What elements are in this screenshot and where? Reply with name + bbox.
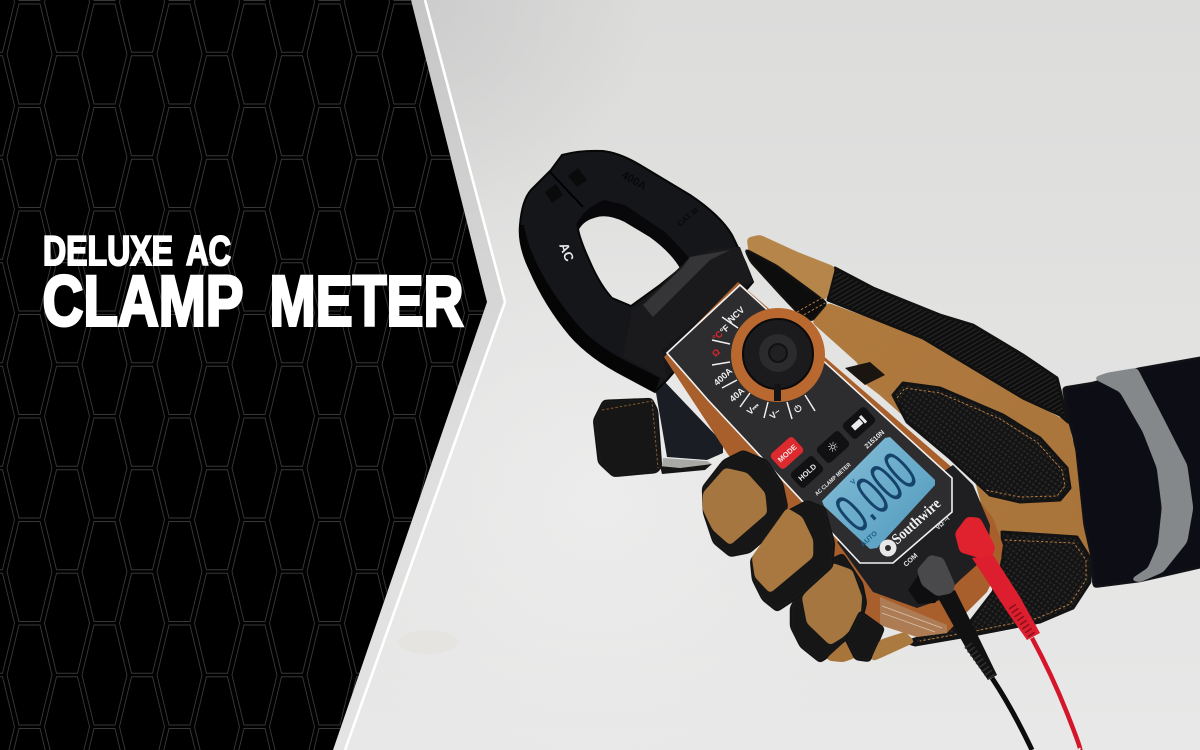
- dial ring: [731, 308, 825, 402]
- tan palm strip: [870, 632, 915, 662]
- buttons: [769, 406, 877, 489]
- knit black strip: [828, 268, 1068, 422]
- fingers: [702, 450, 915, 663]
- HOLD button: HOLD: [796, 462, 819, 483]
- volt label: VΩ·⊣: [935, 516, 951, 531]
- Southwire logo: [880, 496, 944, 556]
- meter name: AC CLAMP METER: [814, 462, 853, 497]
- rating mark: 400A: [620, 169, 648, 193]
- dial labels: [710, 305, 805, 421]
- jaw gap line: [550, 172, 583, 207]
- title: [42, 227, 464, 342]
- clamp jaws: [520, 151, 753, 392]
- chevron light band: [327, 0, 505, 750]
- black chevron panel with hexagon pattern: [0, 0, 487, 750]
- lower housing highlight: [880, 597, 947, 637]
- black wire: [992, 678, 1032, 750]
- lower pad stitching: [920, 540, 1086, 641]
- LCD V label: V: [850, 478, 858, 486]
- meter neck: [623, 247, 753, 380]
- back thumb and jaw underside: [593, 380, 723, 477]
- LCD screen: [822, 437, 935, 549]
- COM label: COM: [903, 552, 920, 568]
- face plate: [667, 285, 952, 563]
- orange housing: [664, 282, 1003, 637]
- jaw shape: [520, 151, 753, 392]
- model number: 21510N: [864, 429, 886, 450]
- brand name: Southwire: [889, 496, 944, 548]
- DC volts label: V⎓: [745, 400, 762, 417]
- tan palm: [812, 303, 1092, 575]
- black ribs: [968, 645, 992, 678]
- LCD display: [822, 437, 935, 549]
- grip highlight: [662, 458, 712, 468]
- palm under fingers: [825, 640, 857, 662]
- jack labels: [903, 516, 951, 568]
- title line 2: CLAMP: [42, 262, 244, 342]
- logo centre: [885, 545, 891, 551]
- hole inner wall: [576, 200, 692, 268]
- meter body: [664, 282, 1003, 637]
- black thumb: [593, 398, 662, 477]
- MODE button: MODE: [776, 442, 799, 464]
- grip shadow strip: [660, 464, 712, 474]
- black strain relief: [937, 590, 997, 680]
- dark grip: [655, 380, 723, 460]
- tan fingertip: [747, 235, 835, 313]
- resistance label: Ω: [710, 347, 722, 359]
- dial tick marks: [712, 317, 815, 419]
- textured palm pad: [893, 383, 1070, 502]
- black lower section: [837, 465, 990, 608]
- red strain relief: [972, 555, 1040, 640]
- AC volts label: V~: [767, 406, 783, 421]
- rotary dial: [731, 308, 825, 402]
- stitching on thumb: [797, 298, 825, 317]
- grey band: [1093, 368, 1193, 582]
- jaw bottom rim: [520, 225, 660, 392]
- temperature label: °C°F: [711, 322, 732, 343]
- black palm strip: [845, 610, 885, 662]
- palm pad stitching: [897, 388, 1065, 497]
- red test lead: [955, 517, 1080, 750]
- finger 1: [702, 450, 788, 557]
- LCD digits: 0.000: [823, 440, 929, 545]
- title line 1: AC: [186, 227, 231, 274]
- black thumb underside: [743, 247, 828, 322]
- black plug head: [917, 555, 955, 596]
- category mark: CAT III: [676, 206, 700, 229]
- dark glove behind meter: [845, 362, 885, 385]
- glove cuff and sleeve: [1062, 355, 1200, 588]
- dial knob: [743, 319, 813, 389]
- neck highlight: [643, 250, 730, 317]
- glove back of hand: [743, 235, 1092, 645]
- NCV label: NCV: [726, 305, 746, 325]
- chevron white line: [345, 0, 505, 750]
- finger 3: [790, 553, 867, 663]
- lower textured pad: [905, 532, 1090, 645]
- title line 1: DELUXE: [43, 227, 173, 274]
- knob centre: [759, 334, 797, 372]
- black cuff: [1062, 355, 1200, 588]
- title line 2: [42, 262, 464, 342]
- black test lead: [917, 555, 1032, 750]
- logo mark: [880, 540, 896, 556]
- dial pointer: [774, 384, 781, 401]
- housing seam lines: [882, 606, 942, 632]
- title line 2: METER: [270, 262, 464, 342]
- thumb stitching: [602, 401, 658, 468]
- red wire: [1032, 638, 1080, 750]
- knob hub: [769, 344, 787, 362]
- finger 2: [750, 500, 835, 612]
- flashlight button: [841, 406, 877, 440]
- 40A label: 40A: [728, 385, 747, 404]
- red ribs: [1012, 606, 1033, 637]
- red plug head: [955, 517, 995, 558]
- backlight button: ☼: [824, 438, 843, 457]
- hinge marks: [545, 168, 587, 203]
- 400A label: 400A: [712, 366, 735, 388]
- AC label: AC: [556, 241, 577, 264]
- LCD AUTO label: AUTO: [860, 530, 879, 548]
- power label: ⏻: [792, 402, 805, 415]
- jack recess: [908, 565, 945, 604]
- model labels: [814, 429, 886, 497]
